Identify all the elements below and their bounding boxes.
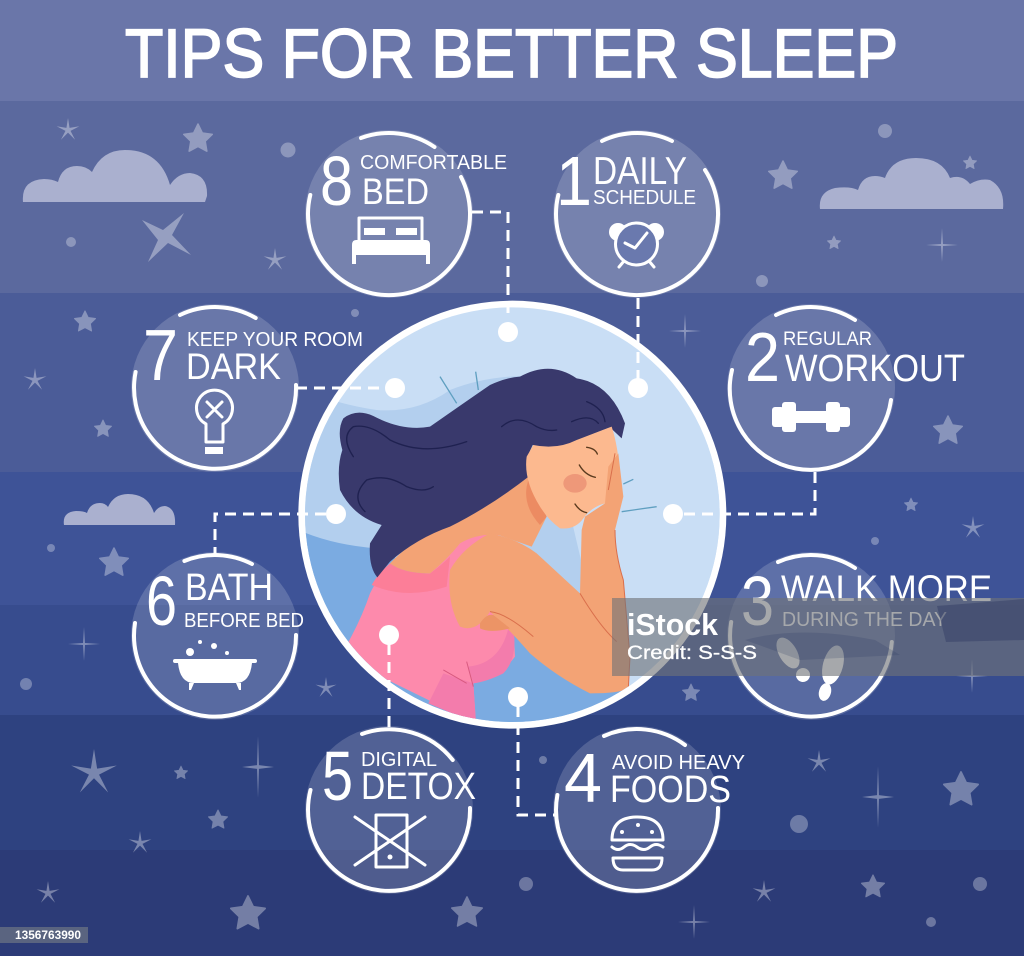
center illustration: sleeping woman bbox=[290, 290, 740, 740]
tip 8: comfortable bed: BED bbox=[362, 171, 429, 212]
tip 5: digital detox: DIGITAL bbox=[361, 749, 437, 771]
tip 2: regular workout bbox=[727, 304, 965, 472]
icon: dumbbell bbox=[772, 402, 850, 432]
connector: 8 comfortable bed to clock top bbox=[472, 212, 508, 320]
arm and hand bbox=[449, 453, 630, 693]
tip 4: avoid heavy foods bbox=[553, 726, 745, 894]
face bbox=[526, 427, 620, 529]
tip 1: daily schedule: DAILY bbox=[593, 150, 687, 193]
tip 1: daily schedule: 1 bbox=[556, 142, 592, 220]
tip 3: walk more during the day: WALK MORE bbox=[781, 568, 992, 609]
tip 7: keep your room dark: DARK bbox=[186, 346, 281, 387]
tip 7: keep your room dark: 7 bbox=[143, 316, 178, 396]
connector: 1 daily schedule bbox=[636, 298, 640, 380]
clock dots on center circle bbox=[326, 322, 683, 707]
dress bbox=[340, 533, 515, 723]
tip 2: regular workout: WORKOUT bbox=[785, 348, 965, 390]
tip 1: daily schedule bbox=[553, 130, 721, 298]
tip 3: walk more during the day: DURING THE DAY bbox=[782, 609, 947, 631]
tip 2: regular workout: 2 bbox=[745, 318, 780, 396]
tip 4: avoid heavy foods: AVOID HEAVY bbox=[612, 752, 745, 774]
icon: light bulb with cross bbox=[196, 390, 233, 454]
connector: 2 regular workout bbox=[684, 470, 815, 514]
tip 6: bath before bed: 6 bbox=[146, 562, 177, 640]
tip 5: digital detox: 5 bbox=[322, 737, 353, 815]
connector: 6 bath before bed bbox=[215, 514, 326, 556]
dots bbox=[20, 124, 987, 927]
tip 7: keep your room dark bbox=[131, 304, 363, 472]
tip 4: avoid heavy foods: 4 bbox=[564, 739, 602, 817]
tip 5: digital detox bbox=[305, 726, 476, 894]
tip 6: bath before bed: BATH bbox=[185, 567, 273, 609]
title: TIPS FOR BETTER SLEEP bbox=[125, 15, 898, 92]
watermark band: Credit: S-S-S bbox=[627, 643, 757, 664]
tip 8: comfortable bed: COMFORTABLE bbox=[360, 152, 507, 174]
icon: alarm clock bbox=[609, 223, 664, 267]
tip 8: comfortable bed: 8 bbox=[320, 142, 353, 220]
icon: bathtub bbox=[173, 640, 257, 690]
watermark band: iStock bbox=[627, 607, 719, 642]
icon: crossed-out phone bbox=[355, 815, 425, 867]
connector: 7 keep your room dark bbox=[296, 386, 386, 390]
tip 7: keep your room dark: KEEP YOUR ROOM bbox=[187, 329, 363, 351]
connector: 5 digital detox bbox=[388, 644, 390, 732]
clouds bbox=[23, 150, 1003, 525]
icon: bed bbox=[352, 218, 430, 264]
watermark band bbox=[612, 598, 1024, 676]
tip 6: bath before bed: BEFORE BED bbox=[184, 610, 304, 632]
stock image id bbox=[0, 927, 88, 943]
hair bbox=[339, 369, 625, 577]
tip 1: daily schedule: SCHEDULE bbox=[593, 187, 696, 209]
tip 6: bath before bed bbox=[131, 552, 304, 720]
icon: burger bbox=[612, 817, 663, 870]
tip 5: digital detox: DETOX bbox=[361, 766, 476, 808]
tip 4: avoid heavy foods: FOODS bbox=[610, 769, 731, 811]
tip 2: regular workout: REGULAR bbox=[783, 329, 872, 350]
connector: 4 avoid heavy foods bbox=[518, 706, 556, 815]
tip 3: walk more during the day bbox=[727, 552, 992, 720]
stock image id: 1356763990 bbox=[15, 928, 81, 942]
neck and chest bbox=[390, 477, 547, 573]
icon: footprints bbox=[772, 634, 848, 702]
tip 3: walk more during the day: 3 bbox=[741, 562, 774, 640]
tip 8: comfortable bed bbox=[305, 130, 507, 298]
